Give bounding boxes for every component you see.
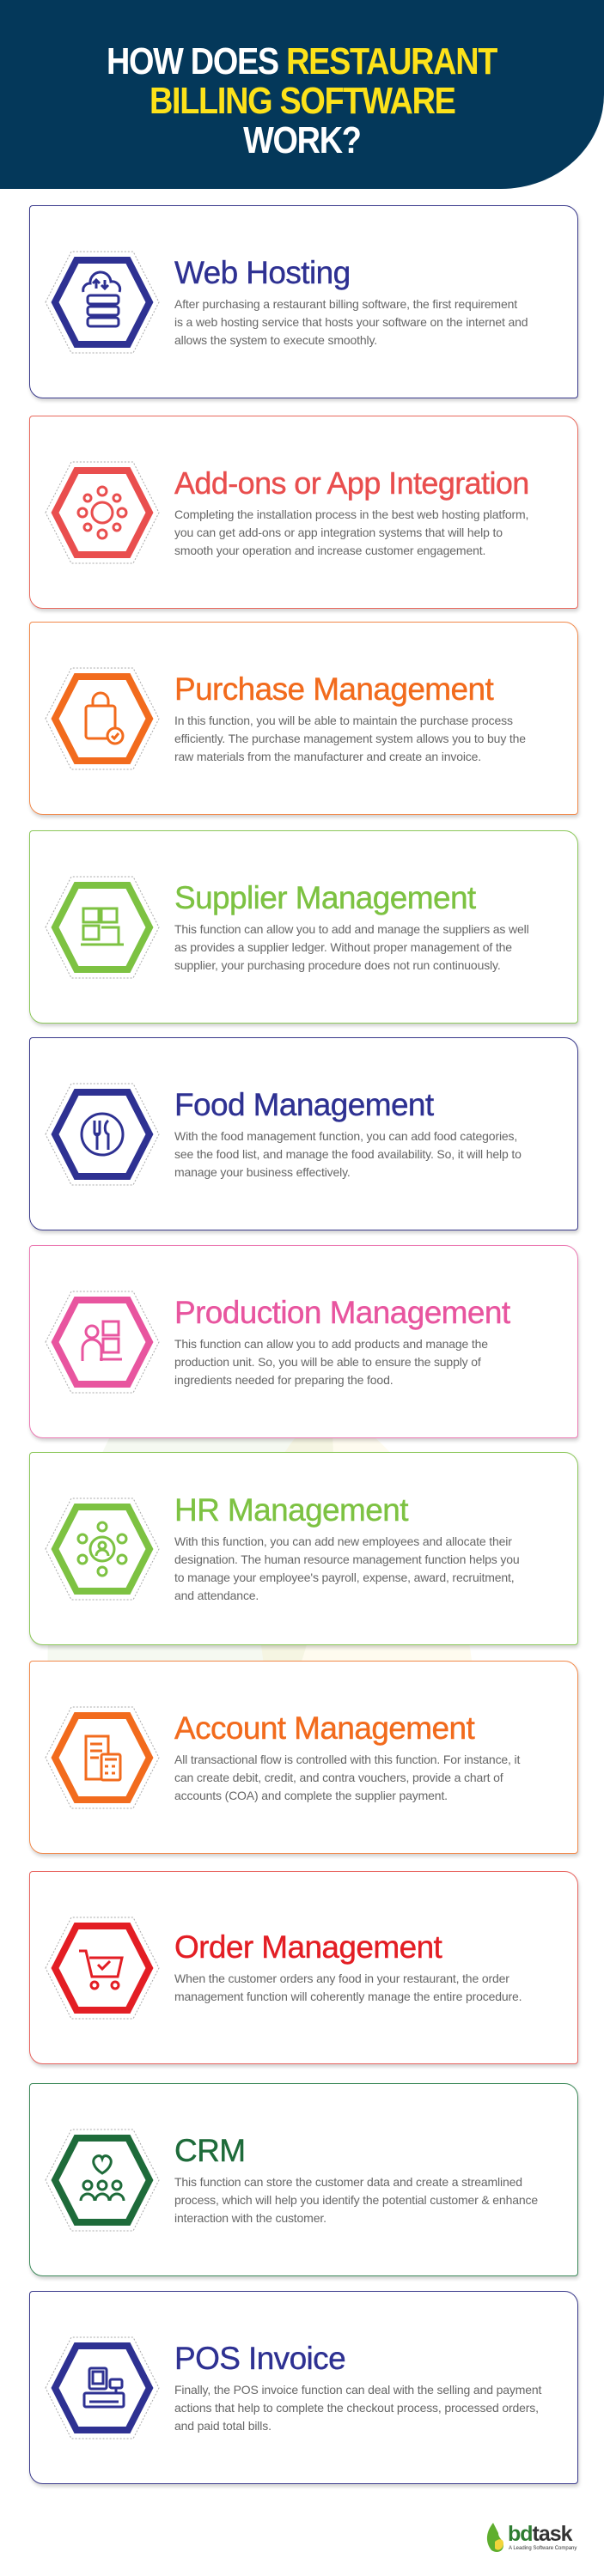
text: Add-ons or App Integration bbox=[174, 465, 529, 500]
text: With this function, you can add new employees and allocate their bbox=[174, 1534, 512, 1548]
text: and paid total bills. bbox=[174, 2418, 271, 2432]
logo: bdtask bbox=[486, 2522, 577, 2552]
text: Completing the installation process in the best web hosting platform, bbox=[174, 507, 528, 520]
icon: cloud server bbox=[45, 251, 160, 354]
text: Production Management bbox=[174, 1295, 510, 1329]
panel: CRM bbox=[29, 2083, 578, 2276]
text: Finally, the POS invoice function can deal with the selling and payment bbox=[174, 2382, 541, 2396]
text bbox=[174, 671, 526, 762]
text bbox=[174, 465, 529, 557]
panel: supplier bbox=[29, 830, 578, 1024]
text: When the customer orders any food in your restaurant, the order bbox=[174, 1971, 509, 1985]
text bbox=[174, 879, 529, 972]
text: supplier, your purchasing procedure does not run continuously. bbox=[174, 958, 501, 972]
text: Purchase Management bbox=[174, 671, 493, 706]
background watermark leaf bbox=[4, 1264, 391, 1844]
text bbox=[174, 1295, 510, 1387]
text: Web Hosting bbox=[174, 254, 351, 290]
text: and attendance. bbox=[174, 1589, 259, 1602]
text bbox=[174, 1492, 520, 1602]
panel: order bbox=[29, 1871, 578, 2064]
text bbox=[174, 254, 528, 347]
title: BILLING SOFTWARE bbox=[149, 80, 455, 122]
text: POS Invoice bbox=[174, 2341, 345, 2375]
icon: integration bbox=[45, 462, 160, 563]
text: actions that help to complete the checkout process, processed orders, bbox=[174, 2401, 539, 2415]
text: This function can store the customer data and create a streamlined bbox=[174, 2174, 522, 2188]
text: accounts (COA) and complete the supplier payment. bbox=[174, 1788, 448, 1801]
text: This function can allow you to add and manage the suppliers as well bbox=[174, 922, 529, 936]
text: smooth your operation and increase customer engagement. bbox=[174, 543, 485, 556]
text: interaction with the customer. bbox=[174, 2210, 326, 2224]
text: process, which will help you identify the potential customer & enhance bbox=[174, 2193, 538, 2207]
text: is a web hosting service that hosts your software on the internet and bbox=[174, 314, 528, 328]
panel: account bbox=[29, 1661, 578, 1854]
text: HR Management bbox=[174, 1492, 408, 1528]
text: management function will coherently manage the entire procedure. bbox=[174, 1990, 522, 2003]
icon: boxes bbox=[45, 876, 160, 979]
text bbox=[174, 1710, 521, 1802]
icon: worker boxes bbox=[45, 1291, 160, 1393]
text: allows the system to execute smoothly. bbox=[174, 333, 377, 347]
text: designation. The human resource management function helps you bbox=[174, 1552, 520, 1566]
text: Account Management bbox=[174, 1710, 474, 1745]
icon: POS terminal bbox=[45, 2337, 160, 2439]
logo: bdtask: A Leading Software Company bbox=[509, 2546, 577, 2551]
logo: bdtask: bdtask bbox=[508, 2522, 572, 2546]
icon: customer heart bbox=[45, 2129, 160, 2231]
text: as provides a supplier ledger. Without proper management of the bbox=[174, 939, 512, 953]
panel: purchase bbox=[29, 622, 578, 815]
icon: cutlery bbox=[45, 1084, 160, 1185]
title: HOW DOES RESTAURANT bbox=[107, 40, 497, 82]
text: All transactional flow is controlled with this function. For instance, it bbox=[174, 1752, 520, 1765]
title bbox=[107, 40, 497, 161]
title: WORK? bbox=[243, 119, 361, 161]
panel: POS invoice bbox=[29, 2291, 578, 2484]
text: Food Management bbox=[174, 1087, 434, 1121]
text bbox=[174, 2133, 538, 2224]
text bbox=[174, 2341, 541, 2433]
panel: food bbox=[29, 1037, 578, 1230]
text: After purchasing a restaurant billing software, the first requirement bbox=[174, 297, 517, 311]
panel: add-ons bbox=[29, 416, 578, 609]
text: Order Management bbox=[174, 1929, 442, 1965]
panel: HR bbox=[29, 1452, 578, 1645]
text: CRM bbox=[174, 2133, 245, 2167]
icon: people network bbox=[45, 1498, 160, 1601]
text: In this function, you will be able to maintain the purchase process bbox=[174, 713, 513, 726]
icon: calculator document bbox=[45, 1707, 160, 1808]
panel: web hosting bbox=[29, 205, 578, 398]
text: ingredients needed for preparing the food. bbox=[174, 1372, 393, 1386]
text: efficiently. The purchase management system allows you to buy the bbox=[174, 732, 526, 745]
panel: production bbox=[29, 1245, 578, 1438]
text: to manage your employee's payroll, expense, award, recruitment, bbox=[174, 1571, 515, 1584]
text bbox=[174, 1087, 522, 1179]
text: With the food management function, you can add food categories, bbox=[174, 1128, 517, 1142]
icon: cart bbox=[45, 1917, 160, 2020]
text: production unit. So, you will be able to ensure the supply of bbox=[174, 1355, 481, 1369]
header banner bbox=[0, 0, 604, 189]
text: can create debit, credit, and contra vouchers, provide a chart of bbox=[174, 1771, 503, 1784]
text bbox=[174, 1929, 522, 2003]
text: you can get add-ons or app integration systems that will help to bbox=[174, 526, 503, 539]
text: Supplier Management bbox=[174, 879, 476, 915]
text: manage your business effectively. bbox=[174, 1164, 351, 1178]
text: raw materials from the manufacturer and create an invoice. bbox=[174, 749, 481, 762]
icon: shopping bag bbox=[45, 668, 160, 769]
text: This function can allow you to add products and manage the bbox=[174, 1336, 488, 1350]
text: see the food list, and manage the food availability. So, it will help to bbox=[174, 1147, 522, 1161]
